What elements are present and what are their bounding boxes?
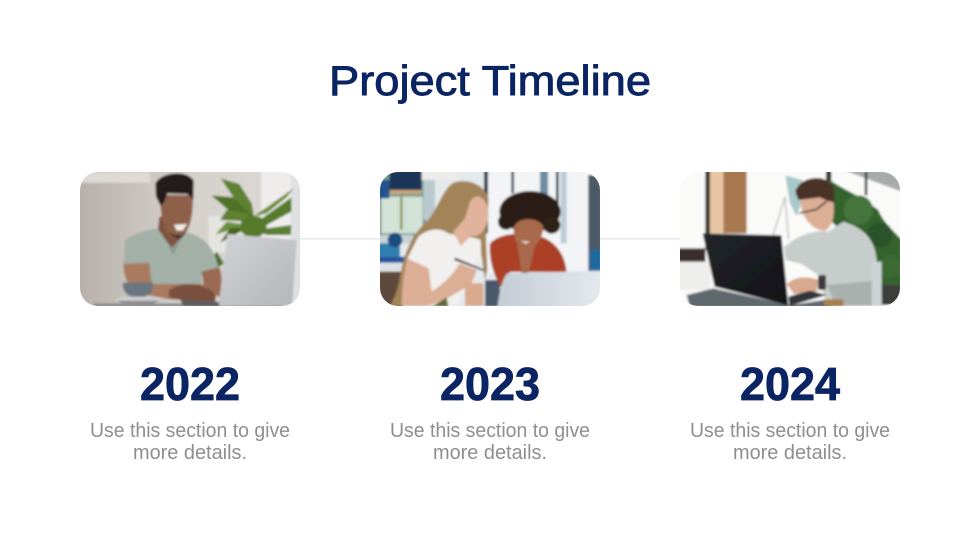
torso <box>124 228 218 284</box>
arm <box>402 258 477 306</box>
photo: two women with laptop, 2023 <box>380 172 600 306</box>
hand <box>168 284 216 302</box>
hand and watch <box>787 277 818 294</box>
white top <box>407 230 481 306</box>
laptop <box>703 233 788 305</box>
neck and head <box>158 217 185 247</box>
head <box>801 192 834 231</box>
year: 2024: 2024 <box>740 358 840 410</box>
year: 2023: 2023 <box>440 358 540 410</box>
description: 2024: more details. <box>733 442 847 464</box>
window top right <box>826 170 831 182</box>
description: 2022: Use this section to give <box>90 420 290 442</box>
cup and saucer <box>123 283 153 297</box>
description: 2022: more details. <box>133 442 247 464</box>
shirt <box>784 222 877 306</box>
laptop <box>219 234 297 306</box>
year: 2022: 2022 <box>140 358 240 410</box>
arms <box>123 260 214 302</box>
lamp <box>785 175 803 217</box>
description: 2024: Use this section to give <box>690 420 890 442</box>
photo: man with laptop, 2022 <box>80 172 300 306</box>
description: 2023: Use this section to give <box>390 420 590 442</box>
timeline connector line <box>300 238 680 240</box>
laptop <box>497 271 602 307</box>
title: Project Timeline <box>329 57 651 104</box>
long blond hair <box>390 181 489 306</box>
red top <box>490 234 567 288</box>
plant <box>828 180 900 288</box>
photo: man with glasses and laptop, 2024 <box>680 172 900 306</box>
description: 2023: more details. <box>433 442 547 464</box>
second face <box>514 219 543 249</box>
blond woman's face <box>453 197 489 246</box>
curly hair <box>499 191 561 232</box>
